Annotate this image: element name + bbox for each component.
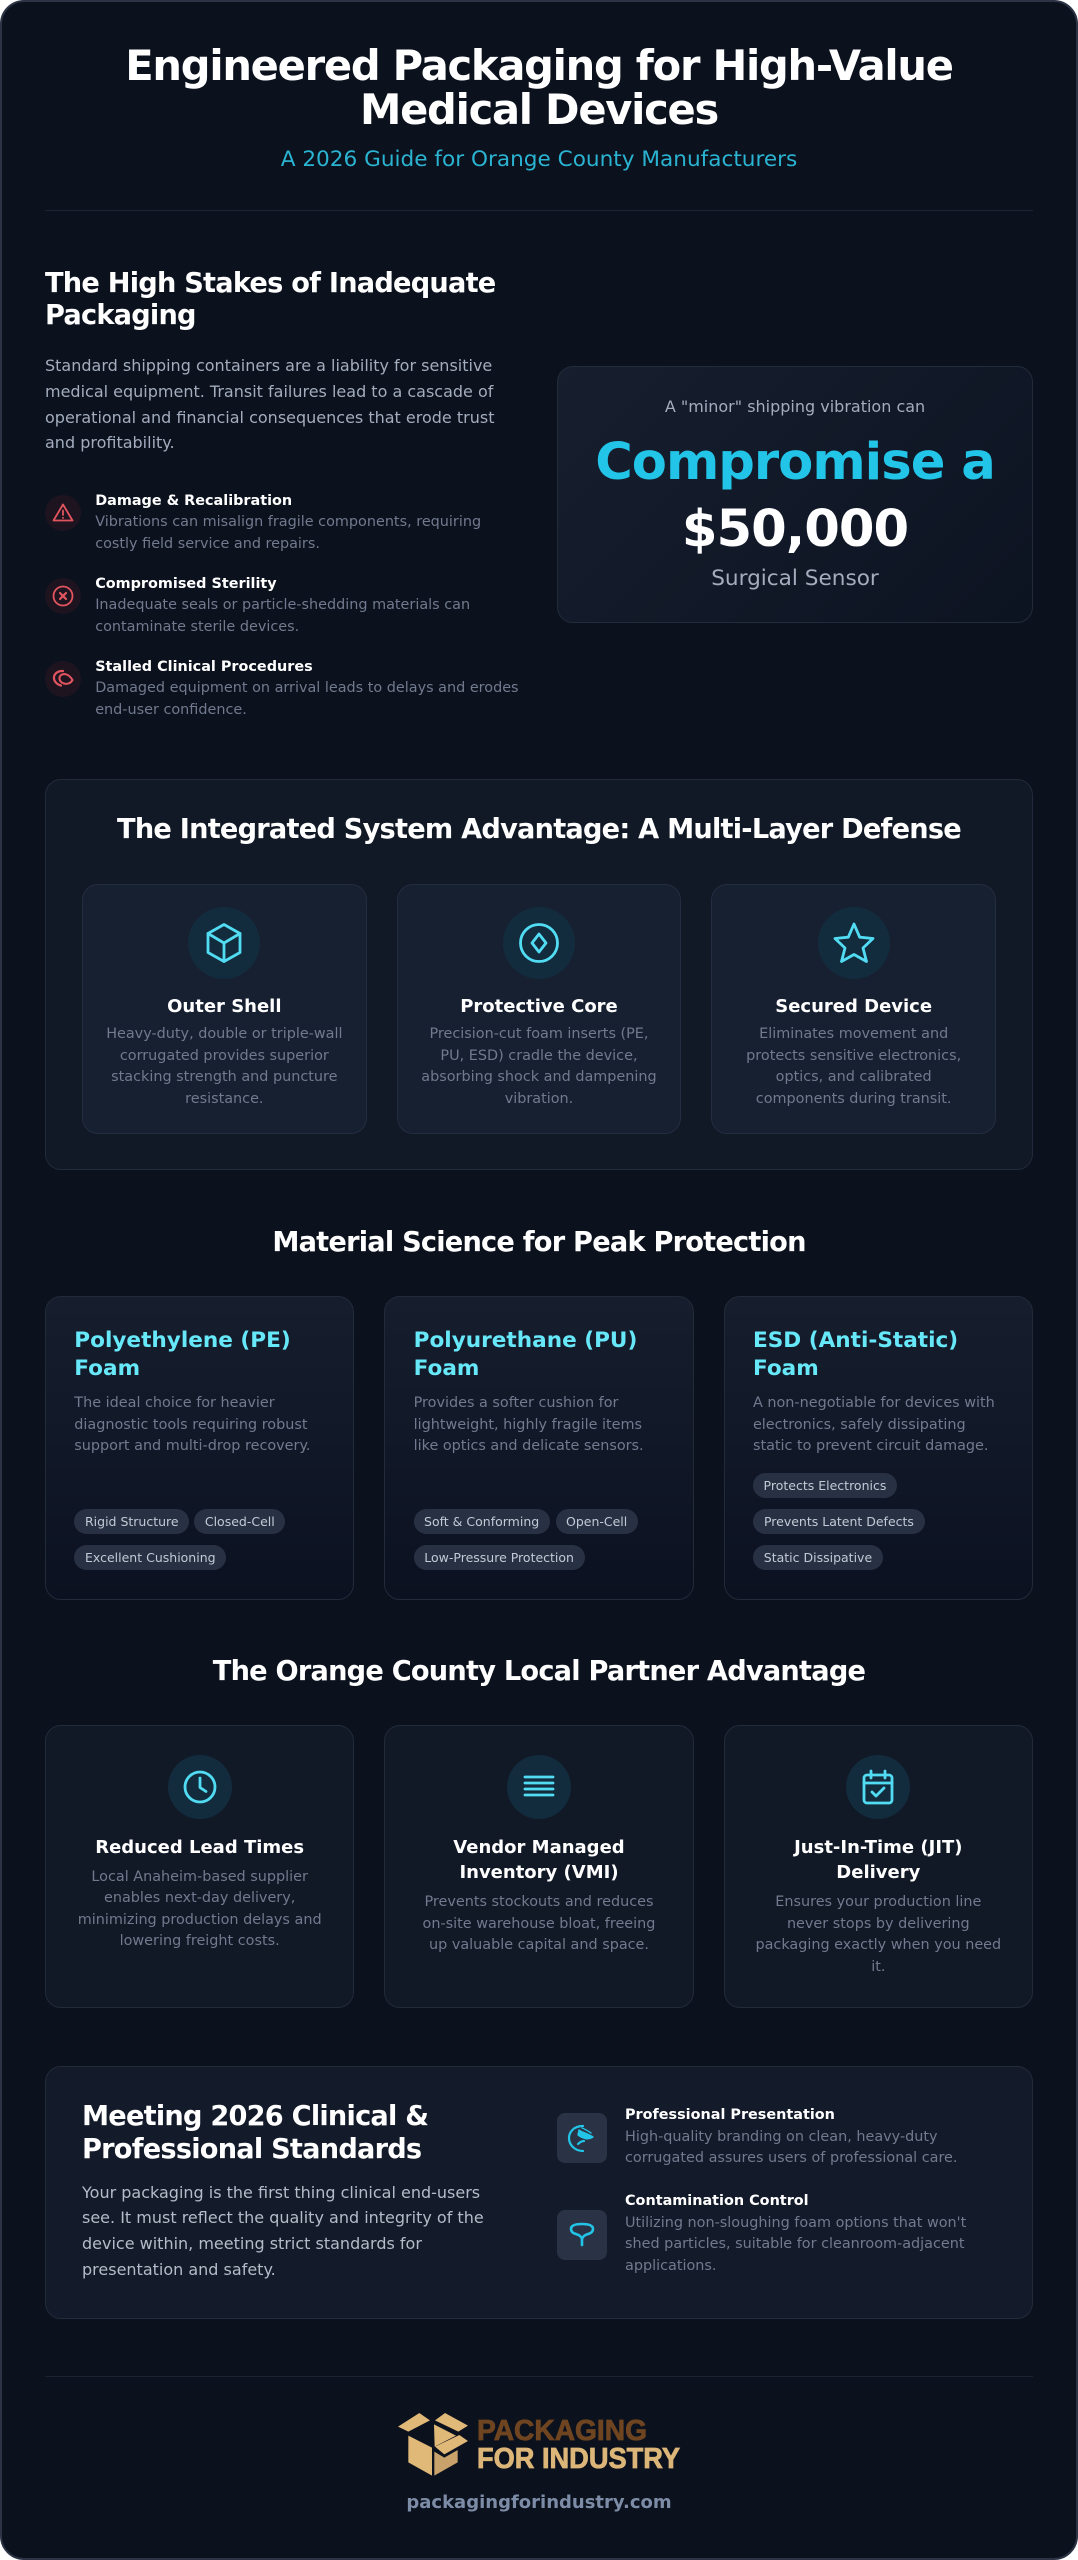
- card title: [453, 1837, 625, 1883]
- card description: components during transit.: [756, 1091, 952, 1107]
- icon: stalled swirl: [45, 661, 81, 697]
- card: protective core: [397, 884, 681, 1134]
- text: presentation: High-quality branding on clean, heavy-duty: [625, 2129, 938, 2145]
- card title: [793, 1837, 963, 1883]
- title: Engineered Packaging for High-Value: [125, 41, 953, 90]
- card: secured device: [711, 884, 996, 1134]
- card description: Eliminates movement and: [759, 1026, 948, 1042]
- card description: stacking strength and puncture: [111, 1069, 338, 1085]
- website url: packagingforindustry.com: [406, 2492, 672, 2513]
- icon: open box: [398, 2413, 468, 2476]
- paragraph: high stakes: [45, 356, 494, 452]
- foam description: The ideal choice for heavier: [74, 1395, 275, 1411]
- logo wordmark: PACKAGING: [477, 2415, 647, 2447]
- item: presentation: [557, 2107, 957, 2166]
- foam title: [414, 1328, 637, 1381]
- card description: [746, 1026, 961, 1107]
- foam description: lightweight, highly fragile items: [414, 1417, 642, 1433]
- card description: packaging exactly when you need: [755, 1937, 1001, 1953]
- foam description: [414, 1395, 644, 1454]
- tag: Closed-Cell: [205, 1514, 275, 1529]
- text: contamination: Utilizing non-sloughing foam options that won't: [625, 2215, 966, 2231]
- text: presentation: [625, 2107, 957, 2166]
- foam title: Foam: [414, 1356, 479, 1381]
- tag: Open-Cell: [566, 1514, 627, 1529]
- heading: clinical standards: Professional Standards: [82, 2134, 421, 2165]
- paragraph: clinical standards: see. It must reflect the quality and integrity of the: [82, 2208, 484, 2227]
- tag: [556, 1509, 638, 1534]
- card: ESD foam: [724, 1296, 1033, 1600]
- text: presentation: corrugated assures users of professional care.: [625, 2150, 957, 2166]
- card description: protects sensitive electronics,: [746, 1048, 961, 1064]
- card title: Delivery: [836, 1862, 920, 1883]
- card description: minimizing production delays and: [78, 1912, 322, 1928]
- card title: Vendor Managed: [453, 1837, 625, 1858]
- icon: x circle: [45, 578, 81, 614]
- card description: it.: [871, 1959, 885, 1975]
- subtitle: A 2026 Guide for Orange County Manufacturers: [281, 147, 797, 172]
- foam description: diagnostic tools requiring robust: [74, 1417, 308, 1433]
- card: VMI: [384, 1725, 694, 2008]
- foam description: support and multi-drop recovery.: [74, 1438, 310, 1454]
- text: sterility: contaminate sterile devices.: [95, 619, 299, 635]
- tag: [414, 1509, 550, 1534]
- tag: Excellent Cushioning: [85, 1550, 216, 1565]
- text: damage: Vibrations can misalign fragile components, requiring: [95, 514, 481, 530]
- icon: contamination: [557, 2210, 607, 2260]
- paragraph: clinical standards: presentation and safety.: [82, 2260, 276, 2279]
- text: sterility: [95, 576, 470, 635]
- tag: Soft & Conforming: [424, 1514, 539, 1529]
- foam title: [74, 1328, 291, 1381]
- card description: lowering freight costs.: [120, 1933, 280, 1949]
- icon: cube: [188, 907, 260, 979]
- heading: integrated system: The Integrated System Advantage: A Multi-Layer Defense: [117, 814, 961, 845]
- heading: local partner: The Orange County Local Partner Advantage: [213, 1656, 865, 1687]
- card description: on-site warehouse bloat, freeing: [423, 1916, 655, 1932]
- card description: Prevents stockouts and reduces: [424, 1894, 654, 1910]
- text: contamination: Contamination Control: [625, 2193, 809, 2209]
- card description: Ensures your production line: [775, 1894, 981, 1910]
- tag: [753, 1509, 925, 1534]
- card description: [423, 1894, 655, 1953]
- text: stalled: end-user confidence.: [95, 702, 247, 718]
- tag: [414, 1545, 585, 1570]
- card description: [421, 1026, 657, 1107]
- title: Medical Devices: [360, 85, 718, 134]
- text: contamination: [625, 2193, 966, 2274]
- icon: stacked lines: [507, 1755, 571, 1819]
- heading: clinical standards: [82, 2101, 428, 2165]
- header: [125, 41, 953, 172]
- text: contamination: shed particles, suitable for cleanroom-adjacent: [625, 2236, 965, 2252]
- paragraph: high stakes: operational and financial consequences that erode trust: [45, 408, 494, 427]
- foam description: static to prevent circuit damage.: [753, 1438, 988, 1454]
- tag: [74, 1545, 226, 1570]
- heading: high stakes: Packaging: [45, 300, 196, 331]
- icon: clock: [168, 1755, 232, 1819]
- card description: up valuable capital and space.: [429, 1937, 649, 1953]
- foam title: Foam: [74, 1356, 140, 1381]
- paragraph: clinical standards: Your packaging is the first thing clinical end-users: [82, 2182, 480, 2202]
- card description: Precision-cut foam inserts (PE,: [429, 1026, 648, 1042]
- panel: integrated system: [45, 779, 1033, 1170]
- text: damage: [95, 493, 481, 552]
- card title: Just-In-Time (JIT): [794, 1837, 963, 1858]
- foam title: Polyurethane (PU): [414, 1328, 637, 1353]
- text: stalled: Damaged equipment on arrival leads to delays and erodes: [95, 680, 519, 696]
- heading: clinical standards: Meeting 2026 Clinical &: [82, 2101, 428, 2132]
- icon: presentation: [557, 2113, 607, 2163]
- card description: vibration.: [505, 1091, 573, 1107]
- card description: resistance.: [185, 1091, 264, 1107]
- panel: clinical standards: [45, 2066, 1033, 2319]
- paragraph: high stakes: Standard shipping containers are a liability for sensitive: [45, 356, 492, 375]
- icon: star: [818, 907, 890, 979]
- foam description: [753, 1395, 995, 1454]
- text: sterility: Compromised Sterility: [95, 576, 277, 592]
- card: PU foam: [384, 1296, 694, 1600]
- foam description: Provides a softer cushion for: [414, 1395, 618, 1411]
- text: damage: Damage & Recalibration: [95, 493, 292, 509]
- text: damage: costly field service and repairs.: [95, 536, 320, 552]
- foam title: ESD (Anti-Static): [753, 1328, 958, 1353]
- card title: Outer Shell: [167, 996, 282, 1016]
- logo: [398, 2413, 680, 2476]
- stat highlight: Compromise a: [595, 432, 995, 492]
- tag: [753, 1473, 897, 1498]
- icon: warning triangle: [45, 495, 81, 531]
- card: outer shell: [82, 884, 367, 1134]
- tag: Static Dissipative: [764, 1550, 872, 1565]
- card description: absorbing shock and dampening: [421, 1069, 657, 1085]
- foam title: [753, 1328, 958, 1381]
- card description: never stops by delivering: [787, 1916, 970, 1932]
- item: sterility: [45, 576, 470, 635]
- title: [125, 41, 953, 134]
- card title: Protective Core: [460, 996, 618, 1016]
- foam description: electronics, safely dissipating: [753, 1417, 966, 1433]
- item: contamination: [557, 2193, 966, 2274]
- card description: optics, and calibrated: [776, 1069, 932, 1085]
- card title: Reduced Lead Times: [95, 1837, 304, 1858]
- footer: [398, 2413, 680, 2476]
- stat value: $50,000: [682, 499, 908, 559]
- card description: [106, 1026, 342, 1107]
- foam title: Foam: [753, 1356, 819, 1381]
- foam description: like optics and delicate sensors.: [414, 1438, 644, 1454]
- card: lead times: [45, 1725, 354, 2008]
- item: stalled: [45, 659, 519, 718]
- tag: Protects Electronics: [764, 1478, 886, 1493]
- foam description: A non-negotiable for devices with: [753, 1395, 995, 1411]
- icon: calendar check: [846, 1755, 910, 1819]
- card description: corrugated provides superior: [120, 1048, 329, 1064]
- text: contamination: applications.: [625, 2258, 716, 2274]
- text: sterility: Inadequate seals or particle-shedding materials can: [95, 597, 470, 613]
- card description: [78, 1868, 322, 1949]
- card description: enables next-day delivery,: [104, 1890, 295, 1906]
- card description: PU, ESD) cradle the device,: [440, 1048, 638, 1064]
- tag: [74, 1509, 189, 1534]
- panel: stat callout: [557, 366, 1033, 623]
- heading: high stakes: The High Stakes of Inadequate: [45, 268, 495, 299]
- paragraph: clinical standards: device within, meeting strict standards for: [82, 2234, 422, 2253]
- card title: Secured Device: [775, 996, 932, 1016]
- item: damage: [45, 493, 481, 552]
- tag: [753, 1545, 883, 1570]
- heading: material science: Material Science for Peak Protection: [272, 1227, 806, 1258]
- card description: Heavy-duty, double or triple-wall: [106, 1026, 342, 1042]
- text: stalled: Stalled Clinical Procedures: [95, 659, 313, 675]
- section: high stakes: [45, 268, 519, 718]
- heading: high stakes: [45, 268, 495, 331]
- stat caption: Surgical Sensor: [711, 566, 879, 591]
- card title: Inventory (VMI): [459, 1862, 619, 1883]
- logo wordmark: FOR INDUSTRY: [477, 2443, 680, 2475]
- tag: Rigid Structure: [85, 1514, 179, 1529]
- foam title: Polyethylene (PE): [74, 1328, 291, 1353]
- stat lead-in: A "minor" shipping vibration can: [665, 397, 925, 416]
- card description: [755, 1894, 1001, 1975]
- card: PE foam: [45, 1296, 354, 1600]
- logo wordmark: [477, 2415, 680, 2475]
- card description: Local Anaheim-based supplier: [91, 1868, 308, 1884]
- paragraph: clinical standards: [82, 2182, 484, 2279]
- card: JIT: [724, 1725, 1033, 2008]
- icon: ring with diamond: [503, 907, 575, 979]
- paragraph: high stakes: and profitability.: [45, 433, 175, 452]
- paragraph: high stakes: medical equipment. Transit failures lead to a cascade of: [45, 382, 493, 401]
- foam description: [74, 1395, 310, 1454]
- tag: [194, 1509, 285, 1534]
- text: stalled: [95, 659, 519, 718]
- tag: Low-Pressure Protection: [424, 1550, 574, 1565]
- text: presentation: Professional Presentation: [625, 2107, 835, 2123]
- tag: Prevents Latent Defects: [764, 1514, 914, 1529]
